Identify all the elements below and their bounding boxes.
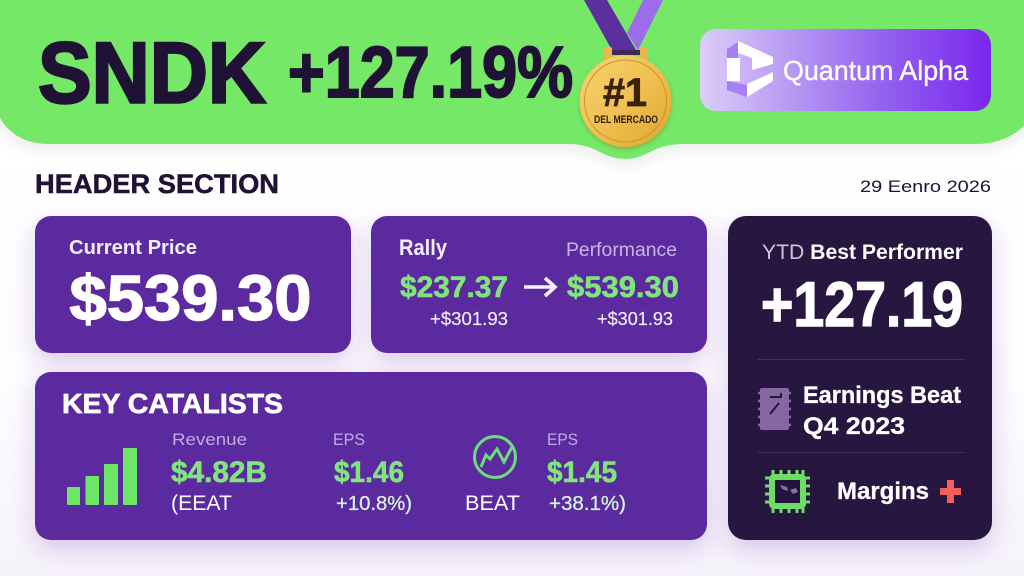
metric: EPS beat: +38.1%) <box>549 493 626 515</box>
icon: gold medal: DEL MERCADO <box>594 114 658 126</box>
panel: YTD best performer: Q4 2023 <box>803 413 905 440</box>
metric: EPS <box>333 430 412 515</box>
metric: EPS beat: $1.45 <box>547 456 617 489</box>
icon: plus <box>940 480 961 503</box>
logo badge: Quantum Alpha <box>783 55 968 86</box>
panel: YTD best performer: +127.19 <box>761 270 963 340</box>
icon: chip <box>765 470 810 513</box>
title: percent gain: +127.19% <box>288 33 573 113</box>
panel: YTD best performer: Earnings Beat <box>803 382 961 409</box>
panel: current price: Current Price <box>69 236 197 259</box>
metric: revenue: (EEAT <box>171 492 232 515</box>
metric: EPS: +10.8%) <box>336 493 412 515</box>
metric: revenue: Revenue <box>172 430 247 449</box>
title: ticker: SNDK <box>38 26 266 122</box>
panel: current price: $539.30 <box>70 262 312 334</box>
metric: revenue <box>171 430 267 515</box>
icon: beat gauge <box>474 436 516 478</box>
metric: EPS beat <box>547 430 626 515</box>
metric: revenue: $4.82B <box>171 456 267 489</box>
panel: rally performance: Performance <box>566 240 677 261</box>
metric: EPS: EPS <box>333 430 365 449</box>
panel: rally performance: Rally <box>399 235 448 260</box>
panel: rally performance: $237.37 <box>400 271 508 304</box>
icon: bar chart <box>67 448 137 505</box>
page background <box>0 140 1024 576</box>
panel: rally performance <box>371 216 707 353</box>
date: 29 Eenro 2026 <box>860 177 991 196</box>
icon: stamp <box>758 388 791 430</box>
panel: rally performance: $539.30 <box>567 271 679 304</box>
metric: EPS beat: EPS <box>547 430 578 449</box>
panel: rally performance: +$301.93 <box>430 308 508 329</box>
panel: current price <box>35 216 351 353</box>
label: beat: BEAT <box>465 492 520 515</box>
arrow <box>524 278 555 296</box>
panel: key catalysts <box>35 372 707 540</box>
panel: YTD best performer <box>728 216 992 540</box>
icon: gold medal: #1 <box>603 71 647 115</box>
metric: EPS: $1.46 <box>334 456 404 489</box>
logo badge <box>700 29 991 111</box>
header banner <box>0 0 1024 159</box>
heading: header section: HEADER SECTION <box>35 169 279 199</box>
panel: key catalysts: KEY CATALISTS <box>62 388 283 419</box>
icon: gold medal <box>580 0 672 147</box>
panel: YTD best performer: Margins <box>837 478 929 505</box>
icon: logo mark <box>727 41 773 97</box>
label: YTD best performer: YTD Best Performer <box>762 241 963 264</box>
panel: rally performance: +$301.93 <box>597 308 673 329</box>
